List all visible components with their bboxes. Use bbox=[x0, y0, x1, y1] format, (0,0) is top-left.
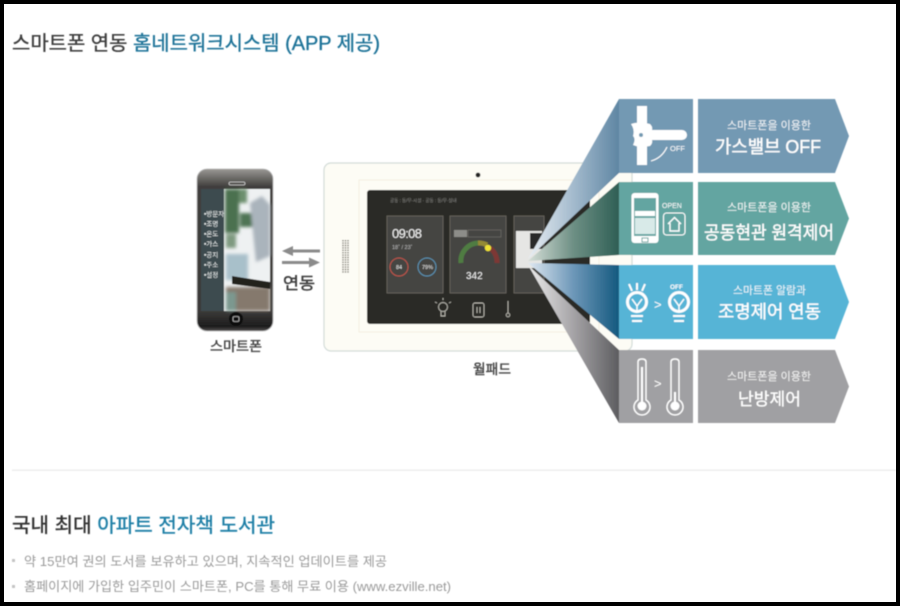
icon: thermometers: > bbox=[654, 376, 662, 391]
second heading: 국내 최대 아파트 전자책 도서관 bbox=[12, 514, 275, 537]
icon: light bulbs bbox=[619, 265, 693, 339]
row: gas valve bbox=[619, 99, 849, 173]
phone menu: ▪방문자 bbox=[204, 209, 224, 218]
wallpad camera bbox=[476, 173, 480, 177]
arrow: gas valve: 가스밸브 OFF bbox=[715, 137, 821, 157]
phone home button bbox=[229, 312, 243, 326]
card: energy gauge: 342 bbox=[466, 271, 483, 282]
phone menu bbox=[204, 209, 224, 279]
phone menu: ▪가스 bbox=[204, 239, 218, 248]
icon: gas valve bbox=[619, 99, 693, 173]
card: weather clock: 84 bbox=[396, 265, 402, 271]
arrow: lighting bbox=[698, 265, 849, 339]
icon: thermometers bbox=[619, 350, 693, 423]
row: heating bbox=[619, 350, 849, 423]
phone menu: ▪온도 bbox=[204, 230, 218, 238]
bullet 2: 홈페이지에 가입한 입주민이 스마트폰, PC를 통해 무료 이용 (www.ezville.net) bbox=[24, 579, 451, 594]
phone menu: ▪공지 bbox=[204, 250, 218, 259]
icon: phone and house bbox=[619, 182, 693, 255]
wallpad screen: 공동 : 동/무·시설 · 공동 : 동/무·실내 bbox=[390, 197, 457, 204]
phone menu: ▪주소 bbox=[204, 261, 218, 269]
card: weather clock: 79% bbox=[422, 265, 433, 271]
wallpad screen bbox=[367, 190, 590, 324]
phone menu: ▪설정 bbox=[204, 270, 218, 279]
phone speaker bbox=[229, 182, 245, 185]
icon: phone and house: OPEN bbox=[662, 203, 682, 210]
arrow: lighting: 조명제어 연동 bbox=[718, 302, 821, 322]
phone photo screen bbox=[201, 189, 270, 311]
card: weather clock: 09:08 bbox=[392, 226, 422, 241]
fan beams bbox=[528, 99, 619, 423]
bullet list bbox=[12, 554, 451, 594]
arrow: heating: 스마트폰을 이용한 bbox=[727, 370, 811, 383]
link label: 연동 bbox=[283, 274, 315, 293]
bottom icons bbox=[435, 298, 510, 317]
smartphone bbox=[197, 169, 273, 331]
row: entrance bbox=[619, 182, 849, 255]
wallpad speaker grille bbox=[343, 240, 348, 273]
link arrows bbox=[282, 246, 320, 268]
row: lighting bbox=[619, 265, 849, 339]
wallpad label: 월패드 bbox=[473, 362, 511, 377]
arrow: entrance bbox=[698, 182, 849, 255]
arrow: heating bbox=[698, 350, 849, 423]
icon: gas valve: OFF bbox=[670, 144, 685, 153]
card: weather clock bbox=[387, 216, 443, 293]
arrow: lighting: 스마트폰 알람과 bbox=[733, 283, 806, 297]
card: energy gauge bbox=[450, 216, 506, 293]
title: 스마트폰 연동 홈네트워크시스템 (APP 제공) bbox=[12, 32, 380, 55]
arrow: gas valve: 스마트폰을 이용한 bbox=[727, 119, 811, 132]
arrow: gas valve bbox=[698, 99, 849, 173]
phone menu: ▪조명 bbox=[204, 219, 218, 228]
icon: light bulbs: > bbox=[654, 297, 662, 312]
wallpad bbox=[324, 163, 632, 351]
icon: light bulbs: OFF bbox=[670, 284, 683, 291]
card: weather clock: 18˚ / 23˚ bbox=[392, 244, 413, 251]
arrow: heating: 난방제어 bbox=[738, 390, 801, 409]
bullet 1: 약 15만여 권의 도서를 보유하고 있으며, 지속적인 업데이트를 제공 bbox=[24, 554, 387, 569]
arrow: entrance: 공동현관 원격제어 bbox=[704, 223, 834, 243]
arrow: entrance: 스마트폰을 이용한 bbox=[727, 201, 811, 214]
smartphone label: 스마트폰 bbox=[210, 339, 262, 354]
card: third bbox=[514, 216, 544, 293]
